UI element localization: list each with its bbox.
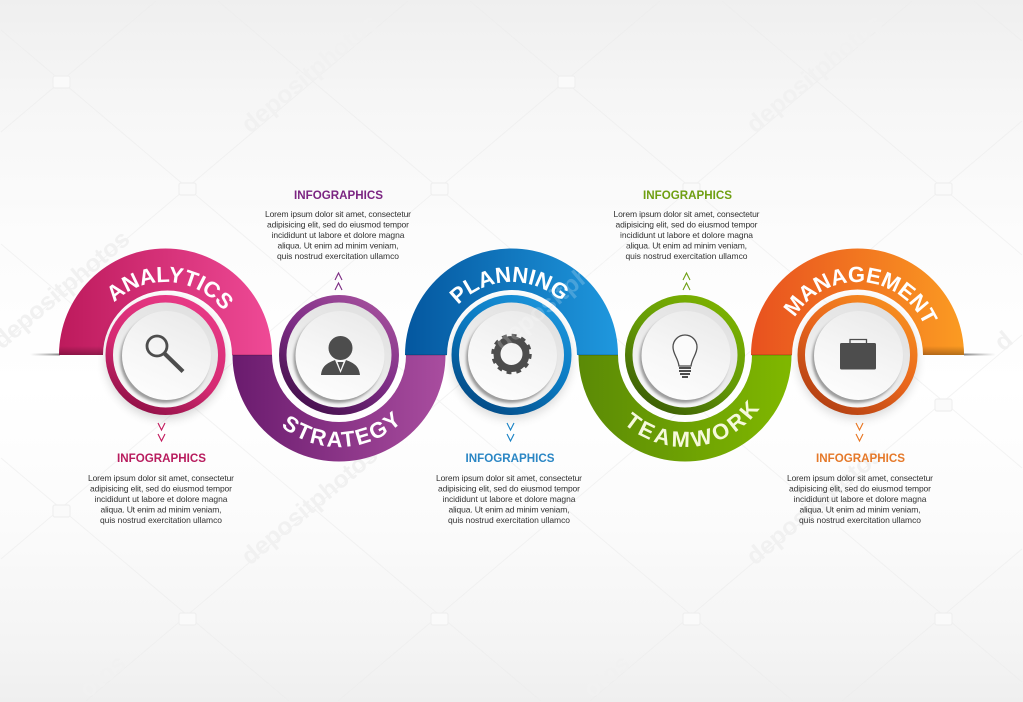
text block: strategy	[265, 189, 411, 261]
label: planning: PLANNING	[449, 266, 568, 304]
background watermark: depositphotos	[237, 9, 383, 139]
text block: strategy: incididunt ut labore et dolore magna	[272, 230, 405, 240]
text block: teamwork	[614, 189, 760, 261]
text block: management: aliqua. Ut enim ad minim veniam,	[800, 504, 920, 514]
text block: planning: INFOGRAPHICS	[466, 452, 555, 465]
text block: strategy: INFOGRAPHICS	[294, 189, 383, 202]
text block: management: quis nostrud exercitation ullamco	[799, 515, 921, 525]
text block: teamwork: incididunt ut labore et dolore magna	[620, 230, 753, 240]
text block: analytics: incididunt ut labore et dolore magna	[94, 494, 228, 504]
circle badge: analytics	[106, 295, 226, 419]
text block: analytics: Lorem ipsum dolor sit amet, consectetur	[88, 473, 234, 483]
background watermark: depositphotos	[742, 9, 888, 139]
background watermark: otos	[579, 650, 635, 702]
panel: management	[751, 248, 964, 422]
background watermark: d	[990, 326, 1018, 357]
text block: teamwork: INFOGRAPHICS	[643, 189, 732, 202]
icon: briefcase	[840, 340, 876, 370]
ribbon: management	[751, 249, 964, 355]
ribbon: planning	[405, 249, 618, 355]
text block: analytics	[88, 452, 234, 525]
text block: strategy: Lorem ipsum dolor sit amet, consectetur	[265, 209, 411, 219]
panel: analytics	[59, 248, 272, 422]
ribbon seam lines	[232, 354, 792, 356]
circle badge: strategy	[279, 295, 399, 415]
text block: analytics: INFOGRAPHICS	[117, 452, 206, 465]
text block: planning: Lorem ipsum dolor sit amet, consectetur	[436, 473, 582, 483]
text block: management: incididunt ut labore et dolore magna	[794, 494, 927, 504]
label: teamwork: TEAMWORK	[627, 400, 760, 447]
icon: person	[321, 336, 360, 375]
arrow: strategy	[335, 273, 342, 290]
arrow: teamwork	[683, 273, 690, 290]
label: analytics: ANALYTICS	[109, 266, 232, 309]
ribbon: strategy	[232, 355, 446, 462]
background watermark: depositphotos	[742, 441, 888, 571]
icon: gear	[493, 336, 530, 372]
text block: management: adipisicing elit, sed do eiusmod tempor	[789, 484, 931, 494]
circle badge: management	[798, 295, 918, 419]
text block: teamwork: adipisicing elit, sed do eiusmod tempor	[616, 220, 758, 230]
circle badge: planning	[452, 295, 572, 419]
watermark over ribbon: depositphotos	[490, 227, 636, 357]
circle badge: teamwork	[625, 295, 745, 415]
label: strategy: STRATEGY	[283, 410, 398, 448]
label: management: MANAGEMENT	[783, 266, 938, 322]
arrow: management	[856, 423, 863, 441]
text block: analytics: adipisicing elit, sed do eiusmod tempor	[90, 484, 232, 494]
background watermark: otos	[75, 650, 131, 702]
text block: teamwork: Lorem ipsum dolor sit amet, consectetur	[614, 209, 760, 219]
text block: strategy: aliqua. Ut enim ad minim veniam,	[278, 240, 398, 250]
text block: analytics: aliqua. Ut enim ad minim veniam,	[100, 504, 222, 514]
ribbon: teamwork	[578, 355, 792, 462]
text block: planning: incididunt ut labore et dolore magna	[442, 494, 576, 504]
text block: planning	[436, 452, 582, 525]
text block: teamwork: quis nostrud exercitation ullamco	[626, 251, 748, 261]
side shadows of the ribbon ends	[30, 354, 996, 356]
panel: strategy	[232, 295, 446, 462]
text block: strategy: adipisicing elit, sed do eiusmod tempor	[267, 220, 409, 230]
panel: planning	[405, 248, 618, 422]
icon: magnifying glass	[147, 336, 183, 372]
text block: management: INFOGRAPHICS	[816, 452, 905, 465]
background watermark: depositphotos	[237, 441, 383, 571]
text block: management	[787, 452, 933, 525]
text block: management: Lorem ipsum dolor sit amet, consectetur	[787, 473, 933, 483]
arrow: analytics	[158, 423, 165, 441]
text block: planning: quis nostrud exercitation ullamco	[448, 515, 570, 525]
text block: teamwork: aliqua. Ut enim ad minim veniam,	[626, 240, 747, 250]
arrow: planning	[507, 423, 514, 441]
text block: analytics: quis nostrud exercitation ullamco	[100, 515, 222, 525]
panel: teamwork	[578, 295, 792, 462]
text block: strategy: quis nostrud exercitation ullamco	[277, 251, 399, 261]
text block: planning: adipisicing elit, sed do eiusmod tempor	[438, 484, 580, 494]
text block: planning: aliqua. Ut enim ad minim veniam,	[448, 504, 570, 514]
icon: light bulb	[673, 335, 697, 377]
ribbon: analytics	[59, 249, 272, 355]
